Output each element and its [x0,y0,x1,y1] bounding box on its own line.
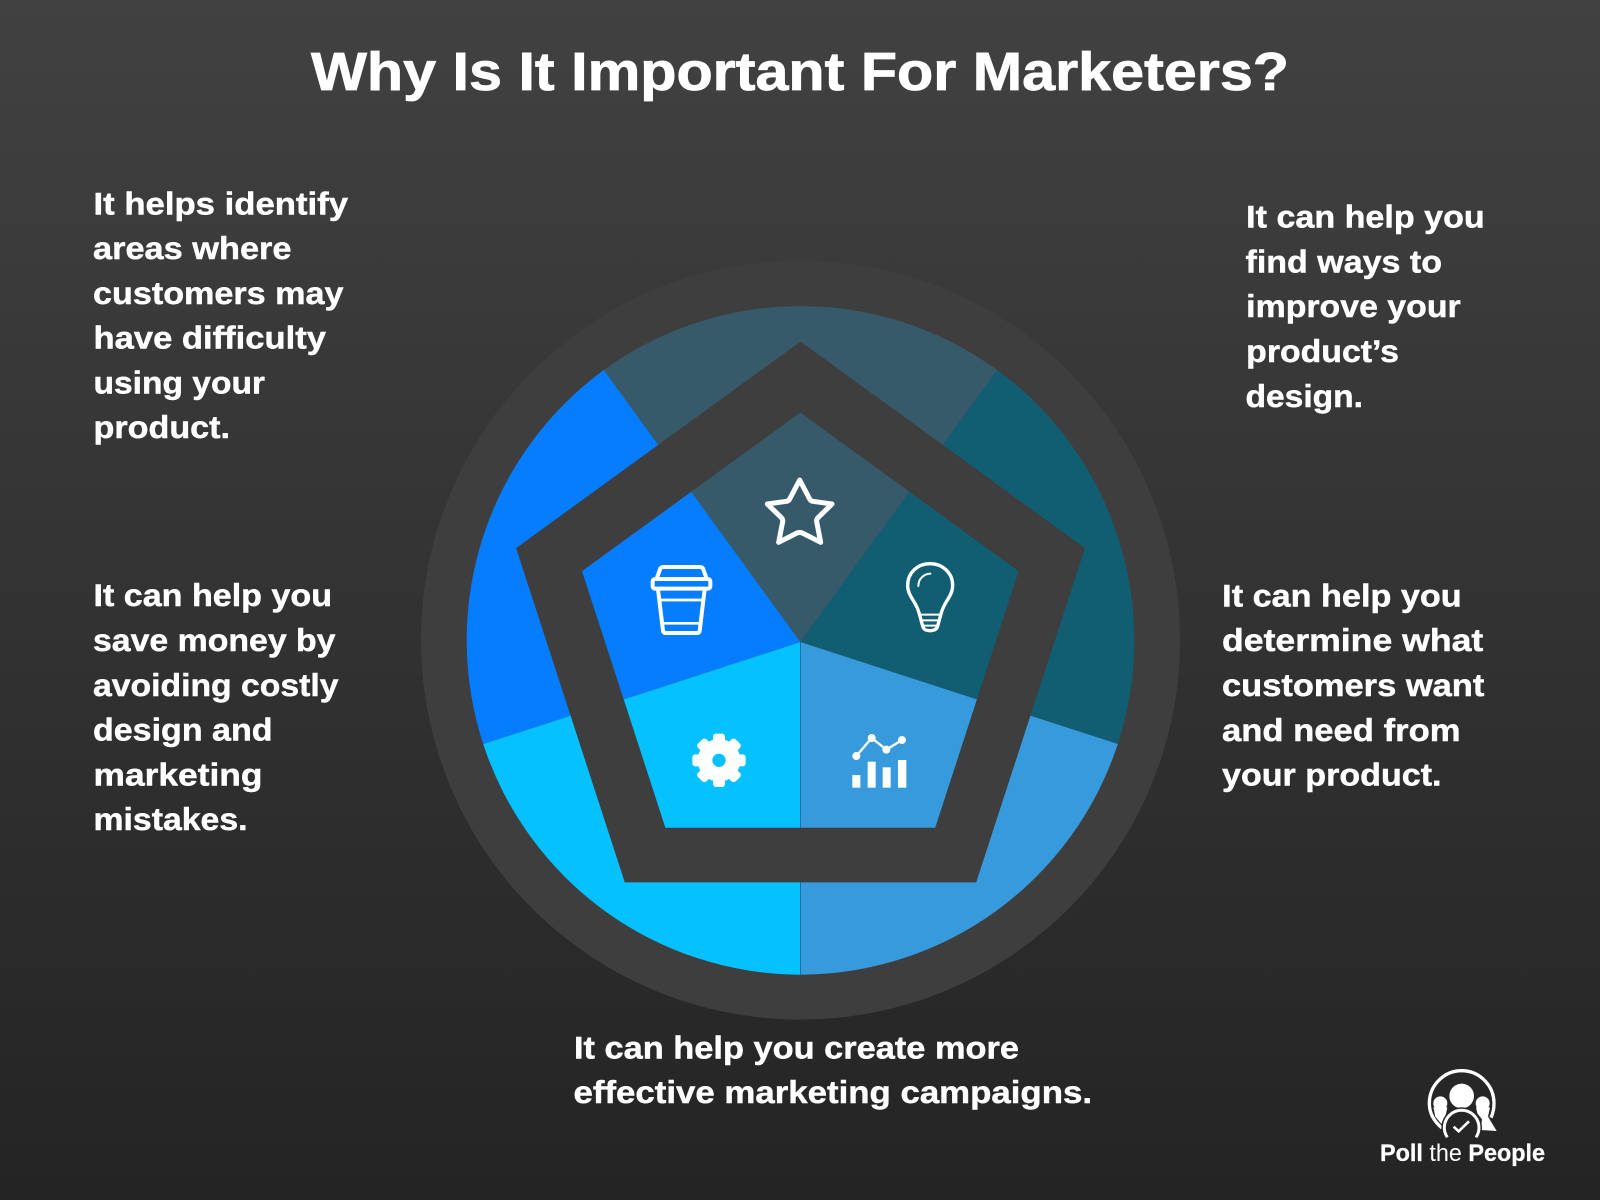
text block: improve design: product’s [1246,333,1399,369]
icon: cup [653,567,710,633]
icon: star [767,480,832,542]
text block: improve design [1246,199,1485,414]
title: Why Is It Important For Marketers? [311,42,1289,102]
pentagon band [516,342,1085,882]
inner segment: star [691,412,909,642]
text block: identify difficulty areas: have difficulty [94,320,327,356]
text block: customer wants: determine what [1222,622,1484,658]
icon: growth chart [852,734,906,788]
icon: gear [692,734,746,787]
text block: save money [93,577,339,837]
text block: customer wants [1222,577,1485,793]
text block: customer wants: and need from [1222,712,1460,748]
inner segment: cup [582,492,800,699]
text block: marketing campaigns: effective marketing campaigns. [574,1074,1092,1110]
text block: identify difficulty areas: It helps identify [94,185,349,221]
text block: improve design: It can help you [1246,199,1485,235]
inner segment: gear [624,642,800,828]
text block: customer wants: customers want [1222,667,1485,703]
text block: save money: design and [93,712,272,748]
text block: identify difficulty areas: using your [94,364,265,400]
outer ring [421,260,1180,1020]
text block: identify difficulty areas: areas where [93,230,292,266]
disc segments [467,306,1134,975]
text block: save money: save money by [93,622,336,658]
text block: identify difficulty areas [93,185,349,445]
inner segment: bulb [800,492,1019,699]
text block: identify difficulty areas: customers may [93,275,344,311]
text block: customer wants: your product. [1222,757,1442,793]
text block: improve design: design. [1246,378,1363,414]
text block: improve design: improve your [1246,288,1461,324]
text block: save money: It can help you [94,577,332,613]
logo: Poll the People [1380,1071,1545,1167]
logo mark [1429,1071,1497,1137]
text block: save money: marketing [94,756,262,792]
text block: improve design: find ways to [1246,243,1442,279]
pentagon diagram [421,260,1180,1020]
text block: save money: avoiding costly [93,667,339,703]
icon: light bulb [908,564,953,631]
logo wordmark: Poll the People [1380,1140,1545,1167]
text block: marketing campaigns: It can help you create more [574,1029,1019,1065]
text block: save money: mistakes. [94,801,248,837]
text block: identify difficulty areas: product. [94,409,230,445]
text block: marketing campaigns [574,1029,1092,1110]
text block: customer wants: It can help you [1222,577,1462,613]
inner segment: chart [800,642,977,828]
